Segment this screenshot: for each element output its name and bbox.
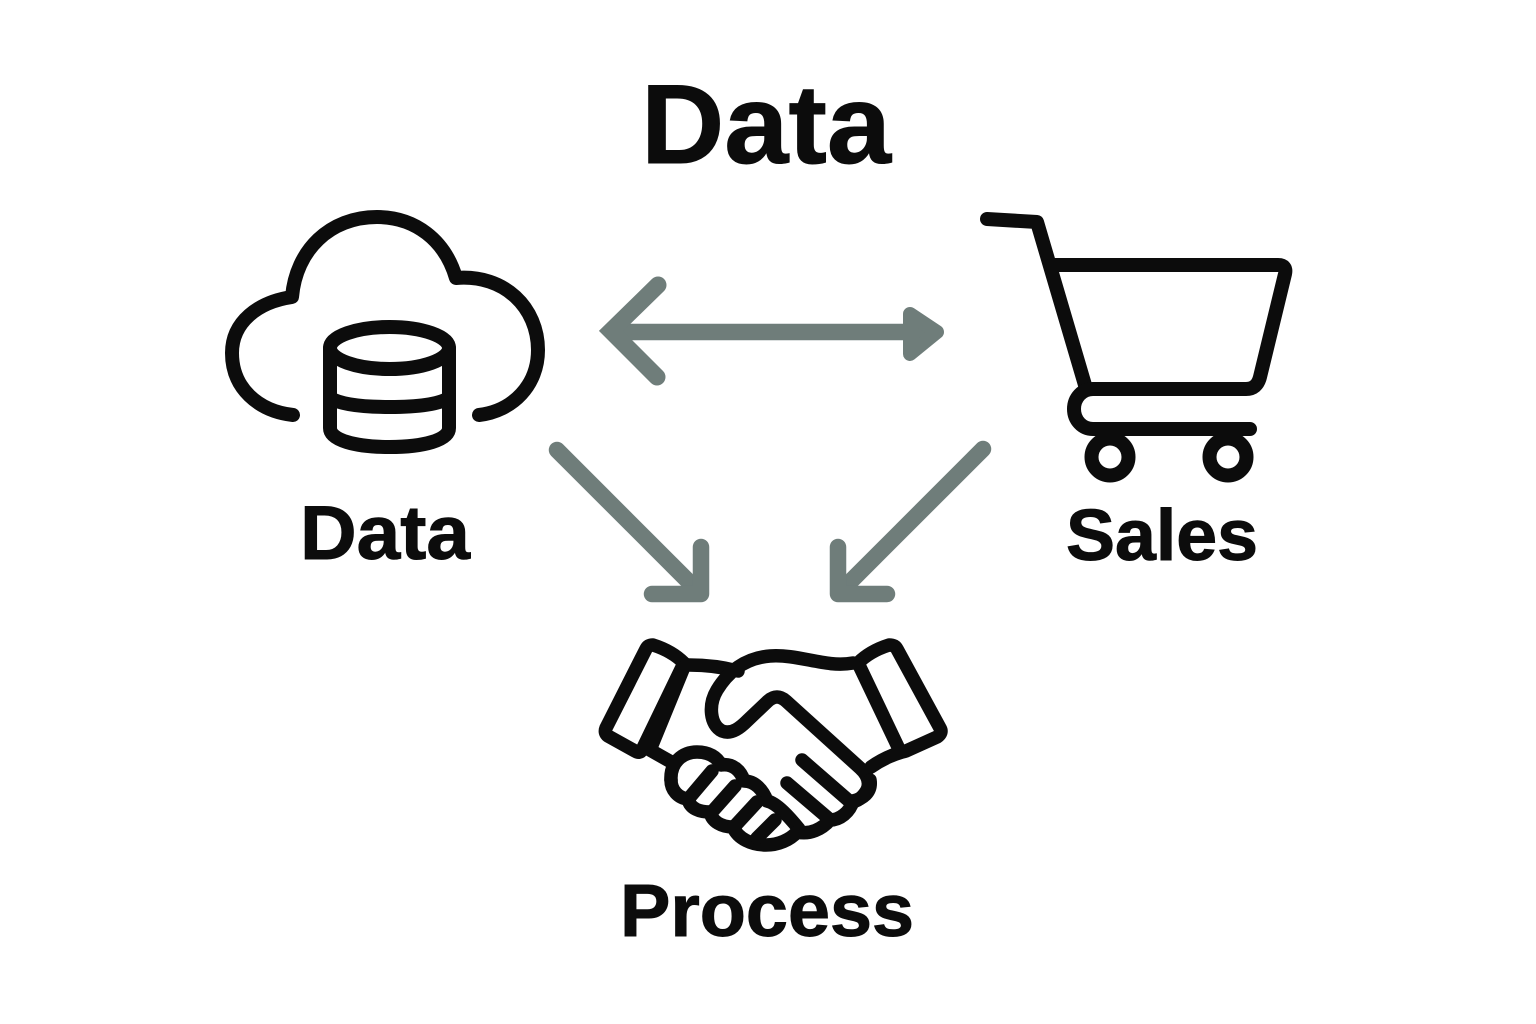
icon: handshake: [605, 645, 941, 845]
arrow: two-way between Data and Sales: [611, 285, 937, 377]
label: Data: Data: [300, 491, 471, 576]
arrow: Sales to Process: [838, 449, 983, 594]
title: Data: [641, 62, 892, 187]
label: Sales: Sales: [1066, 496, 1258, 576]
arrow: Data to Process: [557, 450, 701, 594]
icon: shopping cart: [987, 219, 1285, 476]
icon: cloud with database: [232, 217, 538, 447]
label: Process: Process: [620, 869, 914, 952]
